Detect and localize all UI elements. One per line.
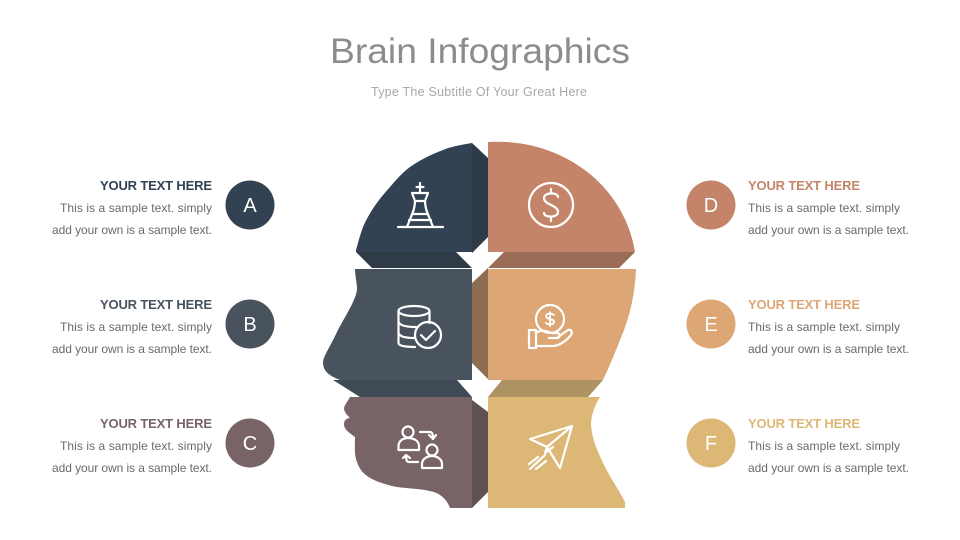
text D bbox=[748, 201, 909, 237]
text B bbox=[52, 320, 212, 356]
item E bbox=[686, 297, 909, 356]
head graphic bbox=[323, 142, 636, 508]
item F bbox=[686, 416, 909, 475]
badge A bbox=[226, 180, 274, 230]
item B bbox=[52, 297, 274, 356]
badge B bbox=[226, 300, 274, 348]
panel A band bbox=[356, 252, 472, 268]
panel A: navy bbox=[356, 143, 472, 252]
text F: add your own is a sample text. bbox=[748, 461, 909, 475]
heading B: YOUR TEXT HERE bbox=[100, 297, 212, 312]
heading E: YOUR TEXT HERE bbox=[748, 297, 860, 312]
icon: dollar coin bbox=[529, 183, 573, 227]
text D: add your own is a sample text. bbox=[748, 223, 909, 237]
heading C: YOUR TEXT HERE bbox=[100, 416, 212, 431]
icon: hand with coin bbox=[529, 305, 572, 348]
text A: add your own is a sample text. bbox=[52, 223, 212, 237]
panel B: slate bbox=[323, 269, 472, 380]
item A bbox=[52, 178, 274, 237]
subtitle: Type The Subtitle Of Your Great Here bbox=[371, 85, 587, 99]
text B: This is a sample text. simply bbox=[60, 320, 212, 334]
badge C bbox=[226, 418, 274, 468]
panel A side fold bbox=[472, 143, 488, 253]
panel C side fold bbox=[472, 400, 488, 508]
badge E: E bbox=[704, 314, 718, 336]
panel C: mauve bbox=[344, 397, 472, 508]
panel E: sand bbox=[488, 269, 636, 380]
badge A: A bbox=[243, 195, 257, 217]
text E: This is a sample text. simply bbox=[748, 320, 900, 334]
panel B band bbox=[333, 380, 472, 397]
text E bbox=[748, 320, 909, 356]
heading F: YOUR TEXT HERE bbox=[748, 416, 860, 431]
text B: add your own is a sample text. bbox=[52, 342, 212, 356]
badge F bbox=[686, 418, 736, 468]
badge D: D bbox=[704, 195, 718, 217]
heading D: YOUR TEXT HERE bbox=[748, 178, 860, 193]
item C bbox=[52, 416, 274, 475]
badge C: C bbox=[243, 433, 257, 455]
text C: add your own is a sample text. bbox=[52, 461, 212, 475]
text C: This is a sample text. simply bbox=[60, 439, 212, 453]
panel E side fold bbox=[472, 268, 488, 379]
panel D band bbox=[488, 252, 635, 268]
heading A: YOUR TEXT HERE bbox=[100, 178, 212, 193]
text F bbox=[748, 439, 909, 475]
badge F: F bbox=[705, 433, 717, 455]
text F: This is a sample text. simply bbox=[748, 439, 900, 453]
title: Brain Infographics bbox=[330, 32, 630, 71]
text D: This is a sample text. simply bbox=[748, 201, 900, 215]
icon: paper plane bbox=[529, 426, 572, 469]
badge D bbox=[686, 180, 736, 230]
icon: people swap bbox=[398, 426, 442, 468]
icon: chess king bbox=[398, 183, 443, 227]
icon: database check bbox=[398, 306, 441, 348]
text C bbox=[52, 439, 212, 475]
badge E bbox=[686, 300, 736, 348]
panel D: terracotta bbox=[488, 142, 635, 252]
text A: This is a sample text. simply bbox=[60, 201, 212, 215]
panel F band bbox=[488, 380, 603, 397]
panel F: gold bbox=[488, 397, 625, 508]
badge B: B bbox=[243, 314, 257, 336]
item D bbox=[686, 178, 909, 237]
text E: add your own is a sample text. bbox=[748, 342, 909, 356]
text A bbox=[52, 201, 212, 237]
